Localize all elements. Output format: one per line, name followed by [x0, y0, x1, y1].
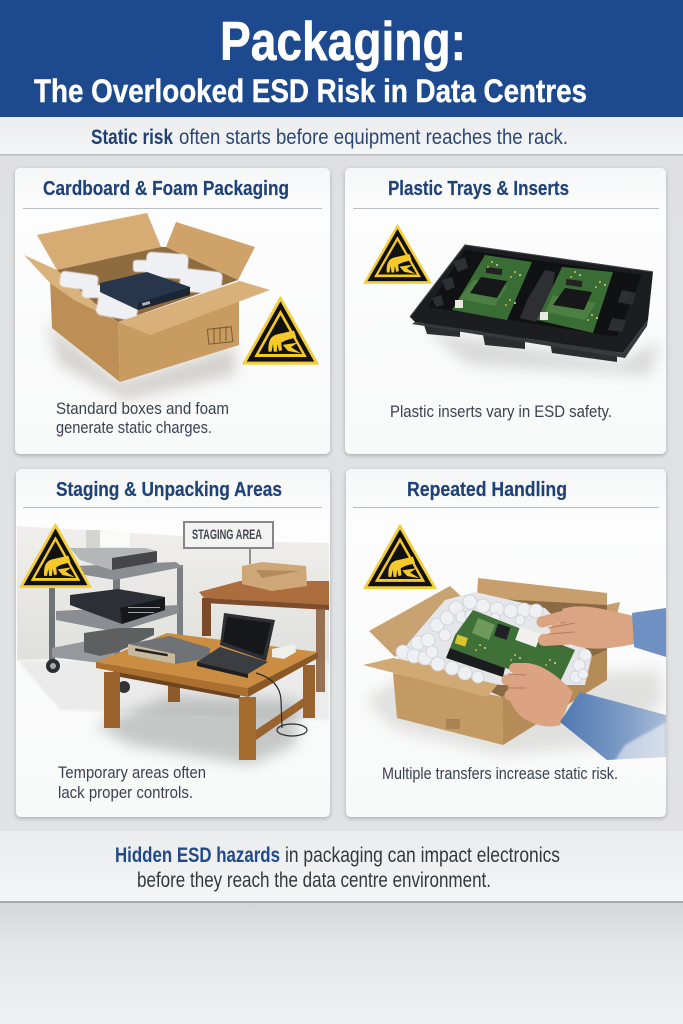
silver server — [70, 548, 157, 570]
body text: cardboard — [56, 399, 229, 437]
illustration: staging room — [17, 522, 329, 765]
heading: staging: Staging & Unpacking Areas — [56, 479, 282, 501]
illustration: black tray with circuit boards — [410, 245, 660, 375]
heading: cardboard: Cardboard & Foam Packaging — [43, 178, 289, 200]
tagline band: often starts before equipment reaches the rack. — [179, 126, 568, 149]
panel: plastic trays and inserts — [345, 168, 666, 454]
body text: repeated handling: Multiple transfers increase static risk. — [382, 764, 618, 783]
icon: ESD warning — [243, 297, 318, 364]
back table — [199, 562, 329, 692]
panel: repeated handling — [346, 469, 666, 817]
icon: ESD warning — [364, 525, 436, 588]
lower background area — [0, 902, 683, 1024]
illustration: hands lifting board from box — [363, 578, 666, 775]
wheels — [46, 659, 60, 673]
front wooden table — [96, 633, 318, 760]
laptop — [197, 613, 296, 678]
footer band — [0, 831, 683, 903]
circuit board — [446, 610, 575, 682]
staging area sign — [184, 522, 273, 564]
upper hand — [542, 606, 634, 649]
body text: plastic trays: Plastic inserts vary in ESD safety. — [390, 402, 612, 421]
header banner — [0, 0, 683, 117]
body text: cardboard: generate static charges. — [56, 418, 212, 437]
foam blocks — [59, 252, 223, 321]
upper sleeve — [632, 608, 666, 657]
device in box — [100, 272, 190, 310]
panel: cardboard and foam packaging — [15, 168, 330, 454]
footer text: Hidden ESD hazards — [115, 844, 280, 867]
heading: plastic trays: Plastic Trays & Inserts — [388, 178, 569, 200]
body text: cardboard: Standard boxes and foam — [56, 399, 229, 418]
device on table — [128, 636, 210, 664]
footer text — [115, 844, 560, 892]
icon: ESD warning — [20, 524, 91, 587]
footer text: before they reach the data centre environment. — [137, 869, 491, 892]
subtitle: The Overlooked ESD Risk in Data Centres — [34, 73, 587, 109]
illustration: open cardboard box — [24, 213, 270, 400]
panel: staging and unpacking areas — [16, 469, 330, 817]
lower sleeve — [560, 692, 666, 760]
cardboard tray on table — [242, 562, 307, 591]
bubble wrap — [398, 592, 592, 685]
tagline band — [0, 117, 683, 156]
barcode — [207, 326, 233, 344]
metal cart — [46, 548, 183, 693]
circuit board 1 — [452, 255, 532, 320]
lower box — [84, 628, 154, 656]
circuit board 2 — [537, 267, 613, 333]
icon: ESD warning — [364, 225, 431, 283]
lower hand — [507, 663, 573, 726]
heading: repeated handling: Repeated Handling — [407, 479, 567, 501]
cable — [256, 673, 307, 736]
body text: staging: lack proper controls. — [58, 783, 193, 802]
body text: staging: Temporary areas often — [58, 763, 206, 782]
box flaps and body — [477, 578, 607, 608]
body text: staging — [58, 763, 206, 802]
dark server — [70, 589, 165, 624]
tray compartments — [432, 257, 636, 332]
staging area sign: STAGING AREA — [192, 526, 262, 542]
tagline band: Static risk — [91, 126, 173, 149]
footer text: in packaging can impact electronics — [285, 844, 560, 867]
title: Packaging: — [220, 10, 466, 72]
